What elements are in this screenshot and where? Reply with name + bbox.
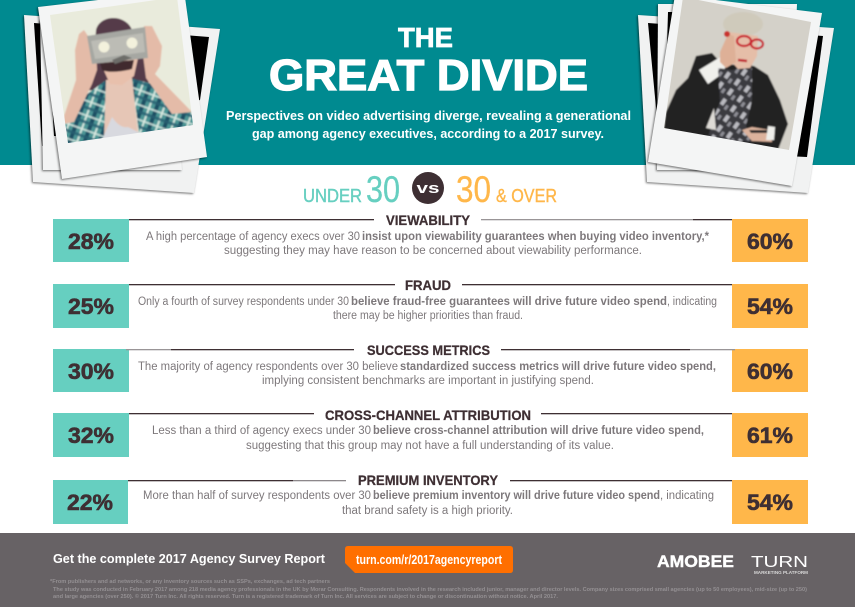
under 30 stat: [53, 284, 129, 328]
fine print: The study was conducted in February 2017 among 218 media agency professionals in the UK by Morar Consulting. Respondents involved in the research included junior, manager and director levels. Company sizes comprised small agencies (up to 50 employees), mid-size (up to 250): [53, 587, 807, 593]
white sleeve: [699, 56, 726, 84]
heading: FRAUD: [405, 277, 451, 293]
logo: Turn marketing platform: [751, 554, 808, 575]
subtitle: Perspectives on video advertising diverge, revealing a generational: [226, 108, 631, 123]
scarf: [708, 65, 752, 142]
fine print: [50, 579, 807, 600]
description: Only a fourth of survey respondents under 30: [138, 296, 349, 308]
30 and over stat: [732, 480, 808, 524]
under 30 stat: 25%: [68, 294, 114, 319]
row: cross-channel attribution: [53, 407, 808, 457]
description: suggesting they may have reason to be concerned about viewability performance.: [224, 245, 642, 257]
description: standardized success metrics will drive future video spend,: [400, 361, 716, 373]
description: believe fraud-free guarantees will drive future video spend: [351, 296, 667, 308]
description: insist upon viewability guarantees when buying video inventory,*: [362, 231, 710, 243]
under 30 vs 30 and over heading: 30: [456, 169, 491, 210]
description: implying consistent benchmarks are important in justifying spend.: [262, 375, 594, 387]
description: [146, 231, 710, 257]
title: [269, 22, 588, 100]
shirt: [65, 80, 106, 143]
face: [729, 32, 758, 69]
under 30 vs 30 and over heading: & OVER: [496, 186, 557, 206]
row: fraud: [53, 277, 808, 328]
vs badge: vs: [416, 180, 440, 197]
logo: Amobee: AMOBEE: [657, 552, 734, 571]
under 30 vs 30 and over heading: [303, 169, 557, 210]
30 and over stat: [732, 284, 808, 328]
description: there may be higher priorities than fraud.: [333, 310, 523, 322]
fine print: *From publishers and ad networks, or any inventory sources such as SSPs, exchanges, ad tech partners: [50, 579, 330, 585]
title: GREAT DIVIDE: [269, 51, 588, 100]
under 30 stat: [53, 413, 129, 457]
arms and hands: [63, 30, 97, 124]
front polaroid: [648, 0, 822, 186]
row: premium inventory: [53, 472, 808, 524]
description: [138, 361, 716, 387]
under 30 stat: 28%: [68, 229, 114, 254]
description: [143, 490, 714, 517]
description: , indicating: [660, 490, 714, 502]
right polaroid stack: [638, 0, 834, 193]
title: THE: [398, 22, 453, 53]
30 and over stat: 60%: [747, 359, 793, 384]
under 30 stat: 30%: [68, 359, 114, 384]
chest and undershirt: [104, 78, 138, 138]
logo: Turn marketing platform: MARKETING PLATFORM: [754, 570, 808, 575]
heading: VIEWABILITY: [386, 212, 471, 228]
fine print: and large agencies (over 250). © 2017 Turn Inc. All rights reserved. Turn is a registered trademark of Turn Inc. All services are subject to change or discontinuation without notice. April 2017.: [53, 593, 559, 600]
orange link button: [345, 546, 513, 573]
description: More than half of survey respondents over 30: [143, 490, 371, 502]
vs badge: [412, 172, 444, 204]
30 and over stat: 54%: [747, 294, 793, 319]
under 30 stat: 22%: [67, 490, 113, 515]
under 30 stat: 32%: [68, 423, 114, 448]
neck and chin: [100, 58, 138, 85]
description: believe cross-channel attribution will drive future video spend,: [373, 425, 704, 437]
hand, phone and cuff: [742, 127, 772, 142]
red glasses: [737, 36, 751, 46]
30 and over stat: [732, 219, 808, 262]
heading: CROSS-CHANNEL ATTRIBUTION: [325, 407, 531, 423]
row: success metrics: [53, 342, 808, 392]
description: believe premium inventory will drive future video spend: [373, 490, 660, 502]
left polaroid stack: [24, 0, 220, 193]
description: Less than a third of agency execs under 30: [152, 425, 371, 437]
row: viewability: [53, 212, 808, 262]
heading: SUCCESS METRICS: [367, 342, 490, 358]
description: [152, 425, 704, 452]
description: , indicating: [667, 296, 717, 308]
subtitle: gap among agency executives, according to a 2017 survey.: [252, 126, 604, 141]
description: [138, 296, 717, 322]
hair: [723, 12, 763, 36]
30 and over stat: 54%: [747, 490, 793, 515]
under 30 stat: [53, 219, 129, 262]
hair: [86, 18, 149, 92]
logo: Turn marketing platform: TURN: [751, 554, 808, 571]
orange link button: turn.com/r/2017agencyreport: [356, 552, 503, 567]
footer: [0, 533, 855, 607]
description: A high percentage of agency execs over 30: [146, 231, 360, 243]
30 and over stat: [732, 413, 808, 457]
photo: older woman in red glasses checking a phone: [664, 0, 811, 150]
heading: PREMIUM INVENTORY: [358, 472, 499, 488]
under 30 vs 30 and over heading: 30: [366, 169, 400, 210]
under 30 stat: [53, 349, 129, 392]
description: The majority of agency respondents over 30 believe: [138, 361, 398, 373]
description: that brand safety is a high priority.: [342, 505, 513, 517]
30 and over stat: [732, 349, 808, 392]
cassette: [87, 27, 148, 64]
30 and over stat: 60%: [747, 229, 793, 254]
coat: [664, 53, 788, 150]
under 30 vs 30 and over heading: UNDER: [303, 186, 362, 206]
call to action text: Get the complete 2017 Agency Survey Report: [53, 551, 326, 566]
header band: [0, 0, 855, 165]
30 and over stat: 61%: [747, 423, 793, 448]
photo: young woman holding a video cassette: [50, 0, 193, 143]
description: suggesting that this group may not have a full understanding of its value.: [246, 440, 614, 452]
front polaroid: [38, 0, 207, 179]
subtitle: [226, 108, 631, 141]
under 30 stat: [53, 480, 128, 524]
